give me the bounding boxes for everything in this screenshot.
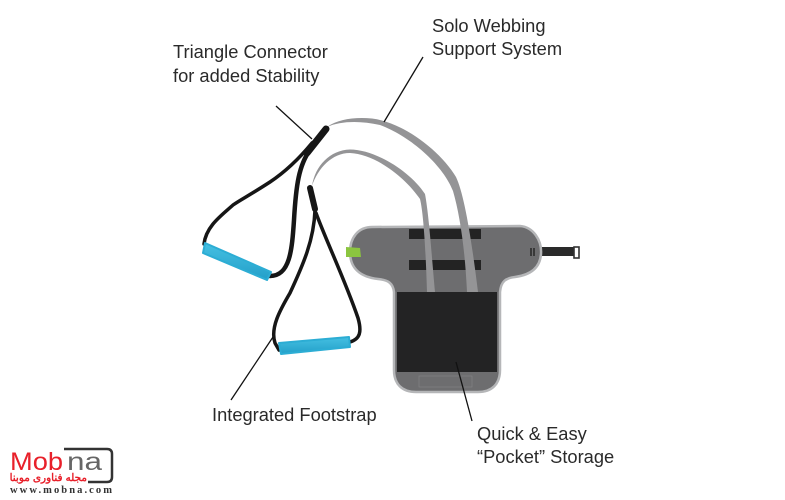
label: pocket storage: “Pocket” Storage [477, 446, 614, 467]
footstrap left strap [274, 210, 315, 350]
black handle straps [204, 129, 360, 350]
label: triangle connector: for added Stability [173, 65, 320, 86]
footstrap right strap [316, 213, 360, 342]
icon: tablet outline [64, 449, 112, 482]
side clips [531, 248, 534, 256]
label: solo webbing: Support System [432, 38, 562, 59]
logo wordmark red: Mob [10, 448, 63, 476]
upper handle left strap [204, 143, 312, 244]
pocket [397, 292, 497, 372]
label: pocket storage: Quick & Easy [477, 423, 587, 444]
logo persian tagline: مجله فناوری موبنا [10, 472, 87, 484]
panel: support seat [346, 226, 579, 392]
footstrap connector [310, 188, 315, 209]
icon: lower blue handle [279, 337, 350, 354]
label: triangle connector: Triangle Connector [173, 41, 328, 62]
logo url: www.mobna.com [10, 485, 112, 496]
logo wordmark gray: na [67, 448, 102, 476]
icon: upper blue handle [203, 243, 271, 280]
green tab [346, 247, 361, 257]
lower velcro strip [409, 260, 481, 270]
upper handle right strap [270, 150, 310, 276]
label: solo webbing: Solo Webbing [432, 15, 546, 36]
arrow: pocket storage [456, 362, 472, 421]
upper velcro strip [409, 229, 481, 239]
triangle connector [307, 129, 326, 153]
arrow: integrated footstrap [231, 337, 273, 400]
long webbing strap [327, 118, 478, 292]
label: integrated footstrap: Integrated Footstrap [212, 404, 377, 425]
short webbing strap [312, 150, 435, 292]
seat body [350, 226, 541, 392]
arrow: solo webbing [384, 57, 423, 122]
buckle strap [538, 247, 579, 258]
gray webbing straps [312, 118, 478, 292]
watermark logo [10, 448, 112, 496]
arrow: triangle connector [276, 106, 312, 139]
pocket lower stitching [419, 376, 472, 387]
leader lines [231, 57, 472, 421]
